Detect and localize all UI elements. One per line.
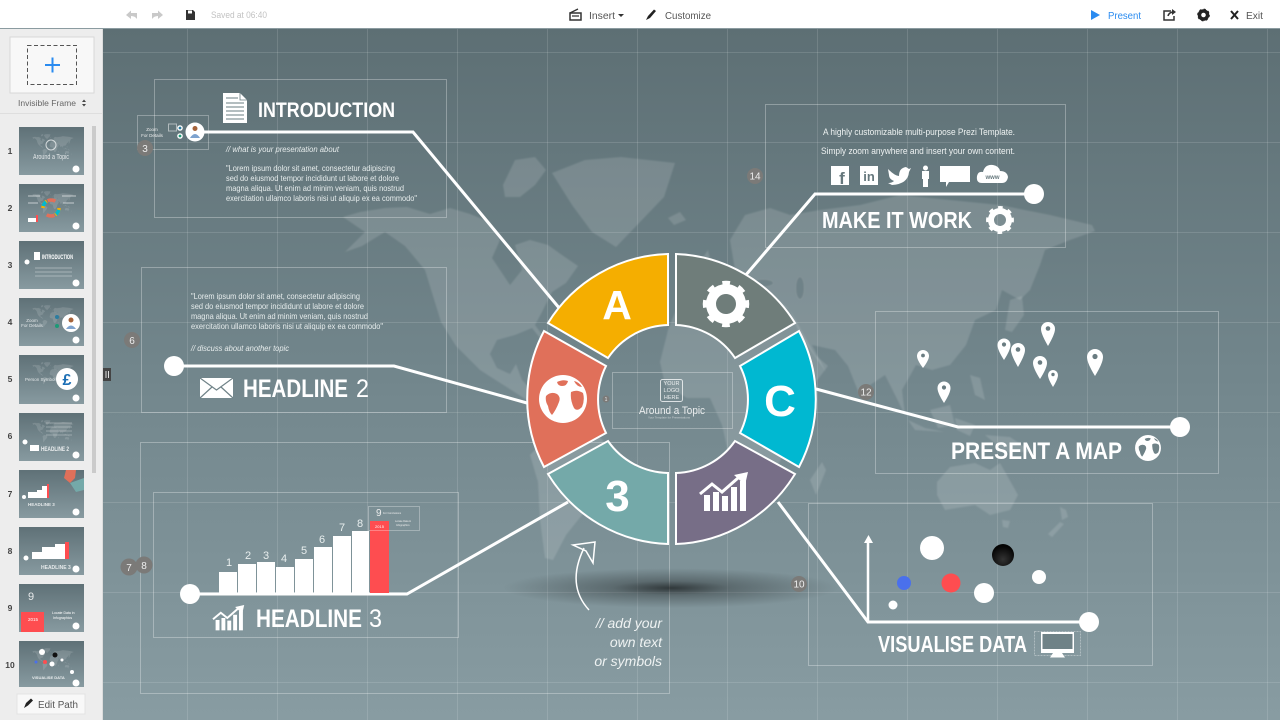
segment globe — [527, 331, 606, 467]
thumbnail 10: VISUALISE DATA — [32, 675, 65, 680]
annotation: hand-drawn arrow — [573, 542, 595, 610]
collapse handle — [103, 368, 111, 381]
connector lines — [174, 132, 1180, 622]
centre logo and title: YOUR — [664, 381, 679, 387]
thumbnail 3: INTRODUCTION — [42, 255, 73, 261]
panel: present a map — [858, 322, 1190, 465]
thumbnail 3 — [8, 241, 84, 289]
thumbnail 9: 9 — [8, 603, 13, 613]
thumbnail 4: For Details — [21, 323, 44, 328]
heading: headline 2: 2 — [356, 375, 369, 403]
node — [180, 584, 200, 604]
thumbnail 10 — [5, 641, 84, 687]
floor shadow — [503, 568, 839, 608]
bar chart: 4 — [281, 553, 287, 565]
thumbnail 6 — [8, 413, 84, 461]
node — [1024, 184, 1044, 204]
thumbnail 8: HEADLINE 3 — [41, 565, 71, 571]
step badges 7 and 8 — [120, 556, 152, 576]
centre logo and title: Your Template for Presentations — [648, 416, 690, 420]
segment 3 — [548, 441, 668, 544]
segment A: A — [602, 282, 632, 328]
icon: envelope — [200, 378, 233, 398]
heading: headline 3: HEADLINE — [256, 605, 362, 633]
body text — [226, 163, 417, 203]
thumbnail 5 — [8, 355, 84, 404]
thumbnail 1 — [8, 127, 84, 175]
insert menu — [570, 9, 624, 22]
body text: Simply zoom anywhere and insert your own content. — [821, 146, 1015, 156]
thumbnail 9: Locate Data in — [52, 611, 75, 615]
world map — [343, 157, 1095, 560]
step badge 14 — [747, 168, 763, 184]
bar chart: 9 — [376, 508, 382, 519]
thumbnail 10: 10 — [5, 660, 15, 670]
body text: magna aliqua. Ut enim ad minim veniam, quis nostrud — [226, 183, 404, 193]
thumbnail 8: 8 — [8, 546, 13, 556]
save icon and status — [186, 10, 267, 21]
thumbnail 9: 9 — [28, 591, 34, 603]
frame boxes — [138, 80, 1218, 694]
step badge 14: 14 — [749, 172, 761, 182]
bar chart: 6 — [319, 534, 325, 546]
thumbnail 3: 3 — [8, 260, 13, 270]
bar chart: For Conclusions — [383, 512, 402, 515]
step badge 1 — [602, 396, 610, 403]
scatter plot — [864, 535, 1046, 622]
heading: headline 2: HEADLINE — [243, 375, 348, 403]
thumbnail 1: Around a Topic — [33, 154, 69, 161]
panel: visualise data — [791, 535, 1099, 658]
top toolbar — [0, 0, 1280, 29]
bar chart — [219, 506, 420, 593]
social icons: www — [984, 175, 1000, 181]
frame type selector: Invisible Frame — [18, 98, 76, 108]
node — [1079, 612, 1099, 632]
segment chart — [676, 441, 795, 544]
step badge 10: 10 — [793, 580, 805, 590]
bar chart: 1 — [226, 557, 232, 569]
heading: visualise data: VISUALISE DATA — [878, 631, 1027, 657]
thumbnail 9 — [8, 584, 84, 632]
body text: exercitation ullamco laboris nisi ut aliquip ex ea commodo" — [191, 321, 383, 331]
bar chart: 2 — [245, 550, 251, 562]
panel: make it work — [747, 127, 1044, 234]
icon: globe — [1135, 435, 1161, 461]
step badge 3 — [137, 140, 153, 156]
icon: gear — [986, 206, 1014, 234]
panel: introduction — [137, 93, 417, 203]
thumbnail 4: Zoom — [26, 318, 38, 323]
settings icon — [1198, 10, 1209, 20]
subtitle: // what is your presentation about — [225, 145, 340, 154]
bar chart: 7 — [339, 522, 345, 534]
icon: document — [223, 93, 247, 123]
bar chart: Infographics — [396, 524, 410, 527]
present button: Present — [1108, 11, 1141, 22]
step badge 3: 3 — [142, 144, 148, 155]
thumbnail 5: Person Symbol — [25, 377, 56, 382]
body text — [191, 291, 383, 331]
thumbnail 6: HEADLINE 2 — [41, 447, 70, 453]
segment A — [548, 254, 668, 358]
bar chart: 5 — [301, 545, 307, 557]
social icons: in — [863, 169, 875, 184]
donut diagram — [527, 254, 816, 544]
thumbnail 2: 2 — [8, 203, 13, 213]
panel: headline 3 — [120, 506, 420, 633]
thumbnail 5: 5 — [8, 374, 13, 384]
body text: sed do eiusmod tempor incididunt ut labore et dolore — [191, 301, 364, 311]
customize button: Customize — [665, 11, 711, 22]
step badges 7 and 8: 8 — [141, 561, 147, 572]
thumbnail 4 — [8, 298, 84, 346]
annotation text: or symbols — [594, 653, 662, 669]
centre logo and title: Around a Topic — [639, 405, 705, 417]
icon: growth chart — [213, 605, 244, 630]
body text — [821, 127, 1015, 156]
zoom label and small nodes: For Details — [141, 133, 164, 138]
segment gear — [676, 254, 795, 358]
thumbnail 9: Infographics — [53, 616, 72, 620]
share icon — [1164, 9, 1176, 20]
social icons: f — [839, 169, 845, 188]
icon: monitor — [1034, 632, 1080, 658]
exit button: Exit — [1246, 11, 1263, 22]
annotation text: own text — [610, 634, 663, 650]
thumbnail 1: 1 — [8, 146, 13, 156]
bar chart: 3 — [263, 550, 269, 562]
add frame button — [10, 37, 94, 93]
bar chart: 8 — [357, 518, 363, 530]
thumbnail 6: 6 — [8, 431, 13, 441]
step badge 6: 6 — [129, 336, 135, 347]
panel: headline 2 — [124, 291, 383, 403]
step badge 12: 12 — [860, 388, 872, 398]
edit path button — [17, 694, 85, 714]
undo and redo icons — [126, 10, 163, 19]
step badge 6 — [124, 332, 140, 348]
thumbnail 5: £ — [63, 372, 72, 389]
zoom label and small nodes: Zoom — [146, 127, 158, 132]
step badge 10 — [791, 576, 807, 592]
sidebar — [0, 29, 103, 720]
step badge 12 — [858, 384, 874, 400]
edit path button: Edit Path — [38, 700, 78, 711]
zoom label and small nodes — [141, 124, 183, 139]
heading: present a map: PRESENT A MAP — [951, 438, 1122, 465]
segment 3: 3 — [605, 472, 630, 521]
bar chart: 2015 — [375, 524, 385, 529]
present button — [1091, 10, 1141, 22]
annotation text: // add your — [595, 615, 663, 631]
node — [1170, 417, 1190, 437]
node — [164, 356, 184, 376]
annotation text — [594, 615, 663, 669]
body text: sed do eiusmod tempor incididunt ut labore et dolore — [226, 173, 399, 183]
centre logo and title — [639, 380, 705, 420]
heading: introduction: INTRODUCTION — [258, 98, 395, 122]
centre logo and title: HERE — [664, 395, 679, 401]
thumbnail 2 — [8, 184, 84, 232]
body text: "Lorem ipsum dolor sit amet, consectetur adipiscing — [191, 291, 360, 301]
avatar node — [186, 122, 204, 142]
segment C: C — [764, 377, 796, 426]
step badge 1: 1 — [605, 397, 608, 403]
centre logo and title: LOGO — [664, 388, 680, 394]
thumbnail 7 — [8, 470, 84, 518]
thumbnail 9: 2015 — [28, 617, 39, 622]
body text: "Lorem ipsum dolor sit amet, consectetur adipiscing — [226, 163, 395, 173]
exit button — [1231, 11, 1263, 22]
scrollbar — [92, 126, 96, 473]
heading: make it work: MAKE IT WORK — [822, 207, 972, 233]
thumbnail 7: HEADLINE 3 — [28, 502, 55, 507]
body text: magna aliqua. Ut enim ad minim veniam, quis nostrud — [191, 311, 368, 321]
step badges 7 and 8: 7 — [126, 563, 132, 574]
body text: A highly customizable multi-purpose Prezi Template. — [823, 127, 1015, 137]
thumbnail 7: 7 — [8, 489, 13, 499]
map pins — [917, 322, 1103, 403]
save icon and status: Saved at 06:40 — [211, 10, 267, 21]
insert menu: Insert — [589, 11, 615, 22]
heading: headline 3: 3 — [369, 605, 382, 633]
bar chart: Locate Data in — [395, 520, 412, 523]
thumbnail 8 — [8, 527, 84, 575]
segment C — [740, 331, 816, 467]
subtitle: // discuss about another topic — [190, 344, 289, 353]
social icons — [831, 165, 1008, 188]
body text: exercitation ullamco laboris nisi ut aliquip ex ea commodo" — [226, 193, 417, 203]
customize button — [646, 10, 711, 22]
thumbnail 4: 4 — [8, 317, 13, 327]
